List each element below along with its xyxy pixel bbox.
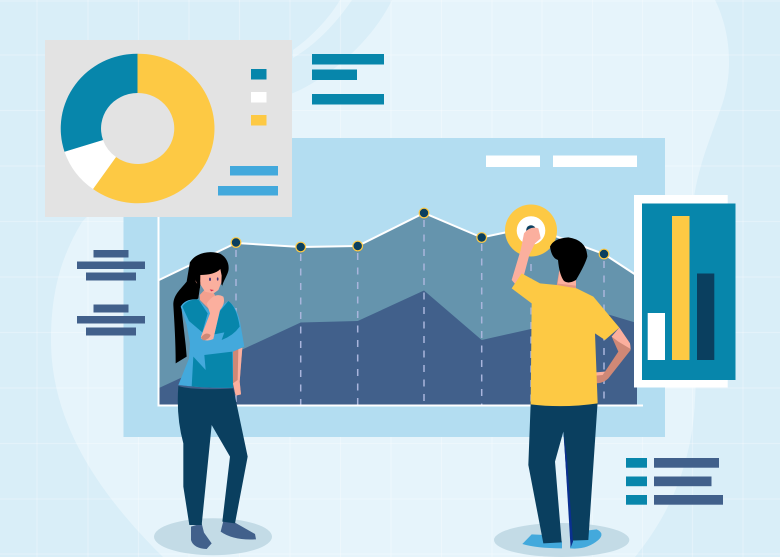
upper body [173, 252, 244, 396]
line series [159, 213, 636, 280]
donut legend [251, 69, 266, 126]
axes [158, 217, 643, 406]
highlighted data point [505, 204, 557, 256]
title placeholder bars [486, 156, 637, 167]
bar: navy [697, 274, 714, 360]
blouse shading: right shoulder [214, 301, 240, 340]
area: lower series [159, 290, 637, 405]
ear [195, 275, 201, 284]
trousers [528, 402, 598, 543]
elbow shading [201, 333, 211, 340]
lower body [178, 386, 256, 549]
bar: white [648, 313, 665, 360]
neck [557, 270, 576, 291]
raised arm [201, 295, 224, 341]
face [199, 268, 222, 294]
shoes [522, 534, 562, 548]
raised arm [512, 228, 541, 285]
panel: main dashboard [124, 138, 665, 437]
near forearm [595, 328, 631, 383]
mouth [210, 289, 214, 291]
blouse shading: left shoulder [182, 299, 208, 332]
bar: yellow [672, 216, 690, 360]
ground shadow [494, 523, 629, 557]
T-shirt [512, 273, 619, 406]
figure: man pointing [494, 228, 631, 557]
area chart [158, 204, 643, 406]
data points [231, 208, 609, 259]
panel: donut chart card [45, 40, 292, 217]
eyes [209, 277, 218, 281]
trouser seam [564, 432, 573, 548]
shoes [191, 523, 212, 549]
back hair [173, 262, 202, 363]
donut caption bars [218, 166, 278, 196]
legend: bottom right [626, 458, 723, 505]
ground shadow [154, 518, 272, 555]
text bars: top right of donut card [312, 54, 384, 104]
figure: woman thinking [154, 252, 272, 555]
text bars: left side [77, 250, 145, 336]
trousers [178, 386, 248, 525]
drop lines [236, 220, 604, 405]
hair [550, 237, 587, 282]
panel: bar chart card [634, 195, 736, 388]
donut chart [61, 54, 214, 203]
neck [200, 287, 215, 313]
top hair [190, 252, 229, 288]
area: upper series [159, 213, 636, 405]
far arm [233, 348, 242, 396]
blouse shading: waist [178, 352, 233, 388]
blouse [178, 299, 244, 388]
